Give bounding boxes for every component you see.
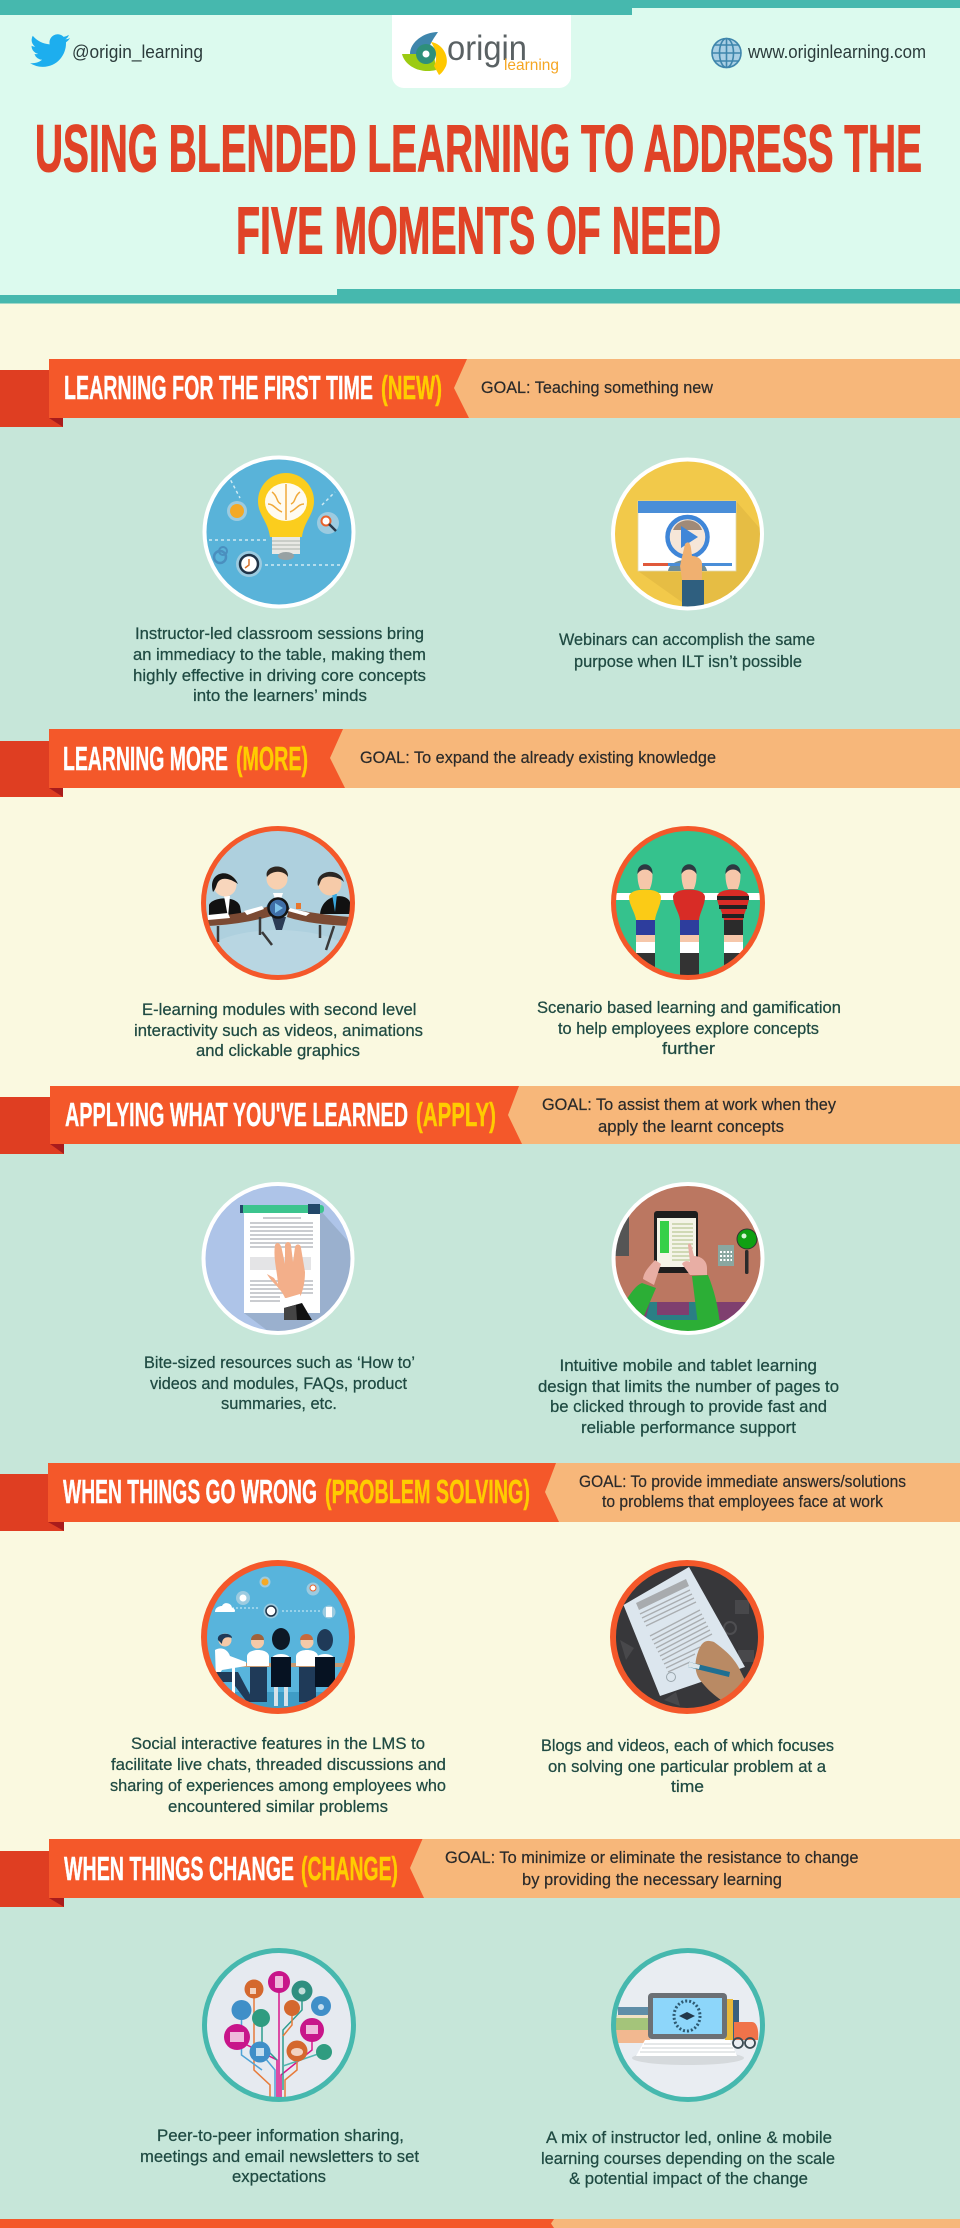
logo: origin (447, 29, 527, 68)
text: intuitive mobile and tablet: design that limits the number of pages to (538, 1377, 839, 1396)
text: instructor-led classroom sessions: into the learners’ minds (193, 686, 367, 705)
text: mix of instructor led: A mix of instructor led, online & mobile (546, 2128, 832, 2147)
text: blogs and videos (541, 1736, 834, 1796)
text: social interactive features (110, 1734, 446, 1816)
banner: when things go wrong: (PROBLEM SOLVING) (325, 1473, 530, 1510)
banner: when things change (0, 1839, 960, 1907)
logo: learning (504, 57, 559, 74)
text: scenario based learning: to help employees explore concepts (558, 1019, 819, 1038)
text: mix of instructor led (541, 2128, 835, 2188)
text: peer-to-peer sharing (140, 2126, 419, 2186)
text: social interactive features: Social interactive features in the LMS to (131, 1734, 425, 1753)
icon: hand signing document (608, 1558, 768, 1718)
text: e-learning modules (134, 1000, 423, 1060)
text: instructor-led classroom sessions: highly effective in driving core concepts (133, 666, 426, 685)
text: social interactive features: encountered similar problems (168, 1797, 388, 1816)
title (35, 112, 922, 268)
website address: www.originlearning.com (747, 42, 926, 62)
banner: learning more: (MORE) (236, 740, 308, 777)
text: blogs and videos: time (671, 1777, 704, 1796)
banner: applying what you've learned: apply the learnt concepts (598, 1118, 784, 1136)
text: peer-to-peer sharing: Peer-to-peer information sharing, (157, 2126, 404, 2145)
banner: learning for the first time: (NEW) (381, 369, 442, 406)
logo (392, 15, 571, 88)
footer bar (0, 2219, 960, 2228)
text: intuitive mobile and tablet (538, 1356, 839, 1437)
text: instructor-led classroom sessions: an immediacy to the table, making them (133, 645, 426, 664)
text: bite-sized resources: Bite-sized resources such as ‘How to’ (144, 1353, 415, 1372)
banner: when things change: GOAL: To minimize or eliminate the resistance to change (445, 1849, 858, 1867)
banner: learning more (0, 729, 960, 797)
banner: learning for the first time: LEARNING FOR THE FIRST TIME (64, 369, 373, 406)
icon: globe (712, 38, 741, 68)
banner: applying what you've learned: (APPLY) (416, 1096, 496, 1133)
text: blogs and videos: on solving one particular problem at a (548, 1757, 827, 1776)
icon: foosball players (610, 825, 770, 985)
text: e-learning modules: and clickable graphics (196, 1041, 360, 1060)
text: peer-to-peer sharing: meetings and email newsletters to set (140, 2147, 419, 2166)
banner: applying what you've learned (0, 1086, 960, 1154)
text: webinars (559, 630, 815, 671)
banner: learning for the first time: GOAL: Teaching something new (481, 379, 713, 397)
text: bite-sized resources: summaries, etc. (221, 1394, 337, 1413)
text: intuitive mobile and tablet: be clicked through to provide fast and (550, 1397, 827, 1416)
banner: learning for the first time (0, 359, 960, 427)
banner: when things go wrong (0, 1463, 960, 1531)
banner: when things change: by providing the necessary learning (522, 1871, 782, 1889)
text: social interactive features: sharing of experiences among employees who (110, 1776, 446, 1795)
banner: when things change: WHEN THINGS CHANGE (64, 1850, 294, 1887)
banner: when things go wrong: to problems that employees face at work (602, 1493, 884, 1511)
banner: applying what you've learned: APPLYING WHAT YOU'VE LEARNED (65, 1096, 408, 1133)
text: webinars: purpose when ILT isn’t possible (574, 652, 802, 671)
banner: learning more: LEARNING MORE (63, 740, 228, 777)
icon: document with hand (200, 1180, 360, 1340)
icon: light bulb with brain (200, 455, 360, 610)
icon: technology tree (200, 1945, 360, 2105)
icon: webinar video window (608, 455, 770, 615)
text: mix of instructor led: learning courses depending on the scale (541, 2149, 835, 2168)
twitter handle: @origin_learning (72, 42, 203, 63)
text: mix of instructor led: & potential impact of the change (569, 2169, 808, 2188)
text: bite-sized resources (144, 1353, 415, 1413)
banner: when things go wrong: GOAL: To provide immediate answers/solutions (579, 1473, 906, 1491)
text: instructor-led classroom sessions (133, 624, 426, 705)
text: blogs and videos: Blogs and videos, each of which focuses (541, 1736, 834, 1755)
text: instructor-led classroom sessions: Instructor-led classroom sessions bring (135, 624, 424, 643)
text: webinars: Webinars can accomplish the same (559, 630, 815, 649)
text: social interactive features: facilitate live chats, threaded discussions and (111, 1755, 446, 1774)
banner: learning more: GOAL: To expand the already existing knowledge (360, 749, 716, 767)
text: e-learning modules: interactivity such as videos, animations (134, 1021, 423, 1040)
text: peer-to-peer sharing: expectations (232, 2167, 326, 2186)
banner: when things change: (CHANGE) (301, 1850, 398, 1887)
text: intuitive mobile and tablet: Intuitive mobile and tablet learning (560, 1356, 817, 1375)
icon: e-learning meeting scene (201, 826, 355, 980)
icon: team at table (200, 1558, 360, 1718)
banner: when things go wrong: WHEN THINGS GO WRONG (63, 1473, 317, 1510)
text: scenario based learning (537, 998, 841, 1058)
icon: twitter bird (30, 34, 70, 67)
icon: tablet in hands (610, 1180, 770, 1340)
header panel (0, 0, 960, 304)
icon: laptop with books (608, 1945, 768, 2105)
text: scenario based learning: Scenario based learning and gamification (537, 998, 841, 1017)
text: scenario based learning: further (662, 1039, 715, 1058)
banner: applying what you've learned: GOAL: To assist them at work when they (542, 1096, 837, 1114)
text: bite-sized resources: videos and modules, FAQs, product (150, 1374, 407, 1393)
text: e-learning modules: E-learning modules with second level (142, 1000, 416, 1019)
text: intuitive mobile and tablet: reliable performance support (581, 1418, 796, 1437)
